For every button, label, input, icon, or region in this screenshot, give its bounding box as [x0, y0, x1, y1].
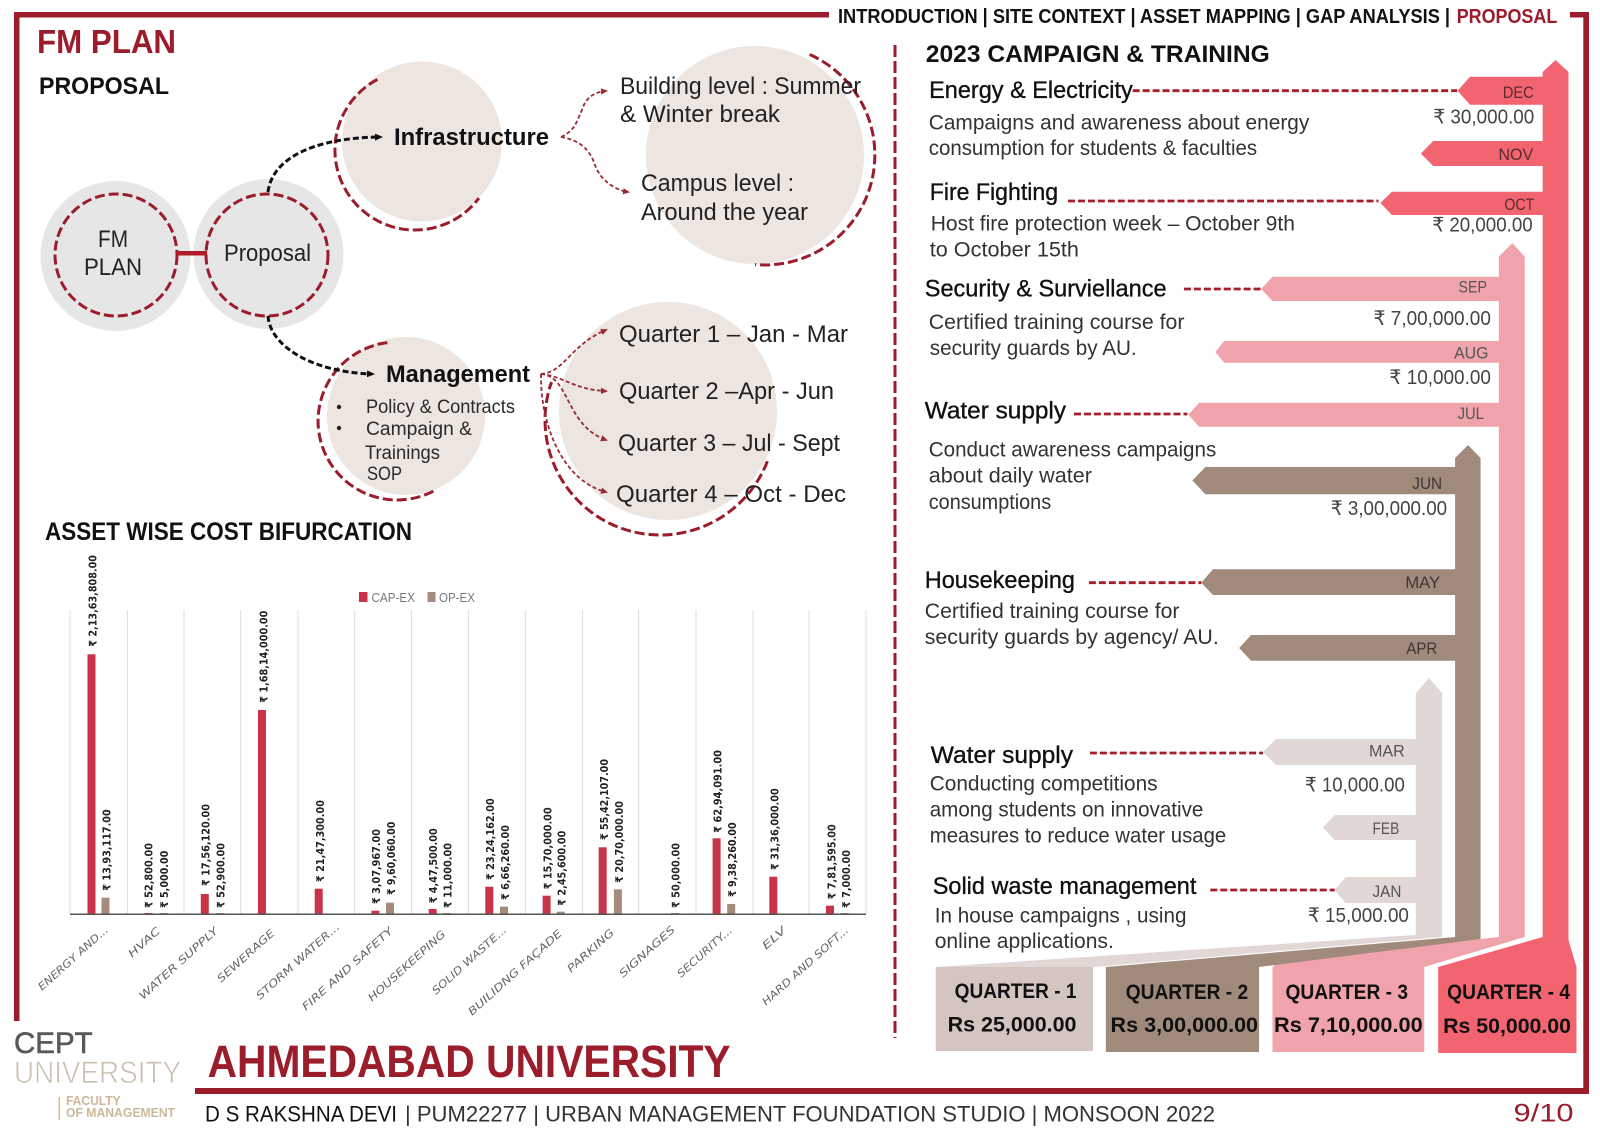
- campaign: energy and electricity: Campaigns and awareness about energy: [929, 111, 1310, 134]
- arrow: quarter 4: ₹ 20,000.00: [1432, 215, 1533, 237]
- bar value labels: ₹ 4,47,500.00: [428, 828, 440, 903]
- arrows: proposal to branches: [268, 137, 380, 374]
- bar value labels: ₹ 52,800.00: [144, 843, 156, 908]
- total: quarter 1: Rs 25,000.00: [948, 1014, 1077, 1037]
- category axis labels: STORM WATER...: [254, 921, 342, 1002]
- group: quarter schedule: [545, 302, 848, 535]
- category axis labels: FIRE AND SAFETY: [300, 924, 397, 1013]
- total: quarter 3: Rs 7,10,000.00: [1274, 1014, 1423, 1037]
- quarter totals: [948, 980, 1571, 1038]
- group: quarter schedule: Quarter 4 – Oct - Dec: [616, 481, 846, 508]
- category axis labels: ENERGY AND...: [36, 924, 111, 993]
- bar value labels: ₹ 5,000.00: [159, 851, 171, 908]
- category axis labels: PARKING: [565, 927, 617, 975]
- campaign: water supply (Q1): measures to reduce water usage: [930, 825, 1226, 848]
- category axis labels: SECURITY...: [675, 924, 735, 980]
- total: quarter 3: [1274, 981, 1423, 1037]
- arrow: quarter 2: APR: [1406, 639, 1437, 658]
- node: Management: Trainings: [365, 443, 440, 464]
- bars: OP-EX: [102, 889, 849, 914]
- bar chart: asset wise cost: [36, 555, 866, 1018]
- node: Infrastructure: [335, 62, 549, 230]
- campaign: water supply (Q3): [925, 397, 1216, 514]
- category axis labels: BUILIDNG FAÇADE: [466, 927, 565, 1018]
- campaign: water supply (Q1): Water supply: [931, 742, 1073, 769]
- campaign: housekeeping: security guards by agency/ AU.: [925, 626, 1219, 649]
- campaign: water supply (Q1): among students on innovative: [930, 799, 1203, 822]
- bar value labels: ₹ 2,13,63,808.00: [88, 555, 100, 647]
- total: quarter 4: QUARTER - 4: [1447, 981, 1570, 1004]
- title: FM PLAN: FM PLAN: [37, 23, 176, 60]
- node: Management: Campaign &: [366, 419, 472, 440]
- connector between nodes: [177, 251, 207, 256]
- group: infrastructure schedule: Campus level :: [641, 170, 794, 197]
- arrow: quarter 1: FEB: [1373, 819, 1399, 838]
- chart legend: CAP-EX: [372, 590, 415, 605]
- campaign: fire fighting: to October 15th: [930, 239, 1079, 262]
- node: Management: Policy & Contracts: [366, 397, 515, 418]
- campaign: solid waste management: [933, 873, 1335, 953]
- heading: asset wise cost bifurcation: ASSET WISE COST BIFURCATION: [45, 518, 412, 546]
- node: FM PLAN: FM: [98, 226, 128, 253]
- arrow: quarter 1: JAN: [1373, 882, 1401, 901]
- logo: CEPT University: OF MANAGEMENT: [66, 1106, 175, 1120]
- arrow: quarter 4: ₹ 30,000.00: [1433, 106, 1534, 128]
- campaign: solid waste management: online applications.: [935, 930, 1114, 953]
- node: Management: Management: [386, 361, 530, 388]
- total: quarter 4: [1443, 981, 1571, 1038]
- arrow: quarter 3: ₹ 7,00,000.00: [1373, 308, 1491, 330]
- campaign: fire fighting: Host fire protection week – October 9th: [931, 213, 1295, 236]
- bar value labels: ₹ 23,24,162.00: [485, 798, 497, 880]
- group: infrastructure schedule: Building level : Summer: [620, 73, 861, 100]
- arrow: quarter 1: ₹ 10,000.00: [1305, 775, 1405, 797]
- campaign: security and surveillance: security guards by AU.: [930, 337, 1137, 360]
- group: infrastructure schedule: Around the year: [641, 199, 808, 226]
- campaign: energy and electricity: consumption for students & faculties: [929, 137, 1257, 160]
- campaign: solid waste management: Solid waste management: [933, 873, 1197, 900]
- group: infrastructure schedule: & Winter break: [620, 101, 781, 128]
- arrow: quarter 2: [1106, 445, 1481, 1052]
- divider: vertical dashed line: [894, 45, 896, 1038]
- footer: author and studio: D S RAKSHNA DEVI: [205, 1102, 397, 1127]
- category axis labels: HVAC: [126, 925, 164, 960]
- total: quarter 1: QUARTER - 1: [955, 980, 1077, 1003]
- campaign: security and surveillance: Security & Surviellance: [925, 276, 1167, 303]
- arrow: quarter 2: JUN: [1412, 474, 1442, 493]
- footer: author and studio: | PUM22277 | URBAN MANAGEMENT FOUNDATION STUDIO | MONSOON 2022: [405, 1102, 1215, 1127]
- campaign: security and surveillance: [925, 276, 1261, 360]
- bar value labels: ₹ 9,38,260.00: [727, 822, 739, 897]
- total: quarter 3: QUARTER - 3: [1285, 981, 1408, 1004]
- group: quarter schedule: Quarter 1 – Jan - Mar: [619, 321, 848, 348]
- bar value labels: ₹ 62,94,091.00: [713, 750, 725, 833]
- category axis labels: [36, 921, 851, 1018]
- heading: PROPOSAL: PROPOSAL: [39, 73, 169, 100]
- category axis labels: SIGNAGES: [617, 924, 678, 980]
- bar value labels: ₹ 3,07,967.00: [371, 829, 383, 904]
- total: quarter 1: [948, 980, 1077, 1037]
- bar value labels: ₹ 13,93,117.00: [102, 809, 114, 891]
- logo: CEPT University: CEPT: [14, 1027, 93, 1060]
- arrow: quarter 1: [936, 678, 1442, 1051]
- campaign: energy and electricity: [929, 77, 1457, 160]
- navigation breadcrumb: INTRODUCTION | SITE CONTEXT | ASSET MAPPING | GAP ANALYSIS |: [838, 5, 1450, 28]
- category axis labels: WATER SUPPLY: [137, 924, 222, 1002]
- heading: 2023 campaign and training: 2023 CAMPAIGN & TRAINING: [926, 41, 1270, 68]
- total: quarter 2: QUARTER - 2: [1126, 981, 1248, 1004]
- campaign: water supply (Q3): Water supply: [925, 397, 1066, 424]
- campaign: solid waste management: In house campaigns , using: [935, 905, 1186, 928]
- bar value labels: ₹ 17,56,120.00: [200, 804, 212, 886]
- panel: quarterly arrow timeline: [936, 60, 1576, 1053]
- campaign: water supply (Q3): about daily water: [929, 465, 1092, 488]
- panel: campaign descriptions: [925, 77, 1457, 953]
- arrow: quarter 3: SEP: [1459, 278, 1487, 297]
- bar value labels: ₹ 6,66,260.00: [500, 825, 512, 900]
- arrow: quarter 4: DEC: [1503, 83, 1534, 102]
- arrow: quarter 1: MAR: [1369, 742, 1405, 761]
- campaign: housekeeping: [925, 567, 1219, 649]
- category axis labels: HOUSEKEEPING: [366, 928, 448, 1004]
- campaign: fire fighting: [930, 179, 1378, 262]
- bar value labels: ₹ 2,45,600.00: [557, 831, 569, 906]
- bar value labels: ₹ 20,70,000.00: [614, 801, 626, 883]
- group: quarter schedule: Quarter 3 – Jul - Sept: [618, 430, 840, 457]
- bar value labels: ₹ 21,47,300.00: [315, 800, 327, 882]
- category axis labels: HARD AND SOFT...: [760, 924, 851, 1008]
- campaign: fire fighting: Fire Fighting: [930, 179, 1058, 206]
- arrow: quarter 3: ₹ 10,000.00: [1389, 367, 1491, 389]
- bar value labels: ₹ 7,000.00: [841, 850, 853, 908]
- panel: proposal diagram: [40, 46, 875, 535]
- bar value labels: ₹ 9,60,060.00: [386, 822, 398, 895]
- campaign: security and surveillance: Certified training course for: [929, 311, 1184, 334]
- bar value labels: ₹ 11,000.00: [442, 843, 454, 908]
- arrow: quarter 2: ₹ 3,00,000.00: [1331, 498, 1447, 520]
- campaign: housekeeping: Certified training course for: [925, 600, 1179, 623]
- arrow: quarter 4: [1380, 60, 1576, 1053]
- arrow: quarter 4: OCT: [1504, 195, 1534, 214]
- node: Management: [318, 337, 530, 500]
- arrow: quarter 1: ₹ 15,000.00: [1308, 905, 1409, 927]
- bar value labels: ₹ 1,68,14,000.00: [259, 611, 271, 703]
- bar value labels: ₹ 7,81,595.00: [827, 824, 839, 899]
- bars: CAP-EX: [88, 654, 834, 914]
- category axis labels: SOLID WASTE...: [430, 924, 509, 997]
- campaign: water supply (Q3): consumptions: [929, 491, 1051, 514]
- node: Proposal: Proposal: [224, 240, 311, 267]
- bar value labels: ₹ 52,900.00: [216, 843, 228, 908]
- logo: CEPT University: FACULTY: [66, 1094, 121, 1108]
- group: infrastructure schedule: [620, 46, 875, 265]
- total: quarter 2: [1111, 981, 1258, 1037]
- node: FM PLAN: [40, 181, 190, 331]
- category axis labels: ELV: [760, 924, 790, 952]
- arrow: quarter 2: MAY: [1405, 573, 1440, 592]
- campaign: water supply (Q3): Conduct awareness campaigns: [929, 439, 1216, 462]
- node: Infrastructure: Infrastructure: [394, 124, 549, 151]
- node: Proposal: [194, 179, 344, 329]
- node: FM PLAN: PLAN: [84, 254, 142, 281]
- campaign: water supply (Q1): [930, 742, 1263, 848]
- logo: CEPT University: UNIVERSITY: [14, 1054, 181, 1090]
- campaign: energy and electricity: Energy & Electricity: [929, 77, 1133, 104]
- logo: CEPT University: [14, 1027, 181, 1120]
- arrow: quarter 3: AUG: [1454, 344, 1488, 363]
- total: quarter 2: Rs 3,00,000.00: [1111, 1014, 1258, 1037]
- bar value labels: [88, 555, 853, 908]
- category axis labels: SEWERAGE: [215, 927, 278, 985]
- arrow: quarter 3: [1188, 243, 1525, 1052]
- chart legend: OP-EX: [439, 590, 475, 605]
- arrows: management to quarters: [541, 330, 606, 492]
- bar value labels: ₹ 31,36,000.00: [769, 788, 781, 870]
- chart legend: [359, 590, 475, 605]
- node: Management: SOP: [367, 464, 402, 485]
- chart axis: [70, 914, 866, 915]
- bar value labels: ₹ 15,70,000.00: [543, 807, 555, 889]
- group: quarter schedule: Quarter 2 –Apr - Jun: [619, 378, 834, 405]
- arrows: infrastructure to levels: [561, 91, 628, 192]
- heading: Ahmedabad University: AHMEDABAD UNIVERSITY: [208, 1036, 731, 1087]
- arrow: quarter 3: JUL: [1458, 404, 1484, 423]
- bar value labels: ₹ 50,000.00: [671, 843, 683, 908]
- campaign: housekeeping: Housekeeping: [925, 567, 1075, 594]
- campaign: water supply (Q1): Conducting competitions: [930, 773, 1158, 796]
- navigation breadcrumb: PROPOSAL: [1457, 5, 1557, 28]
- arrow: quarter 4: NOV: [1498, 145, 1534, 164]
- bar value labels: ₹ 55,42,107.00: [599, 759, 611, 840]
- total: quarter 4: Rs 50,000.00: [1443, 1015, 1571, 1038]
- page number: 9/10: [1514, 1100, 1574, 1128]
